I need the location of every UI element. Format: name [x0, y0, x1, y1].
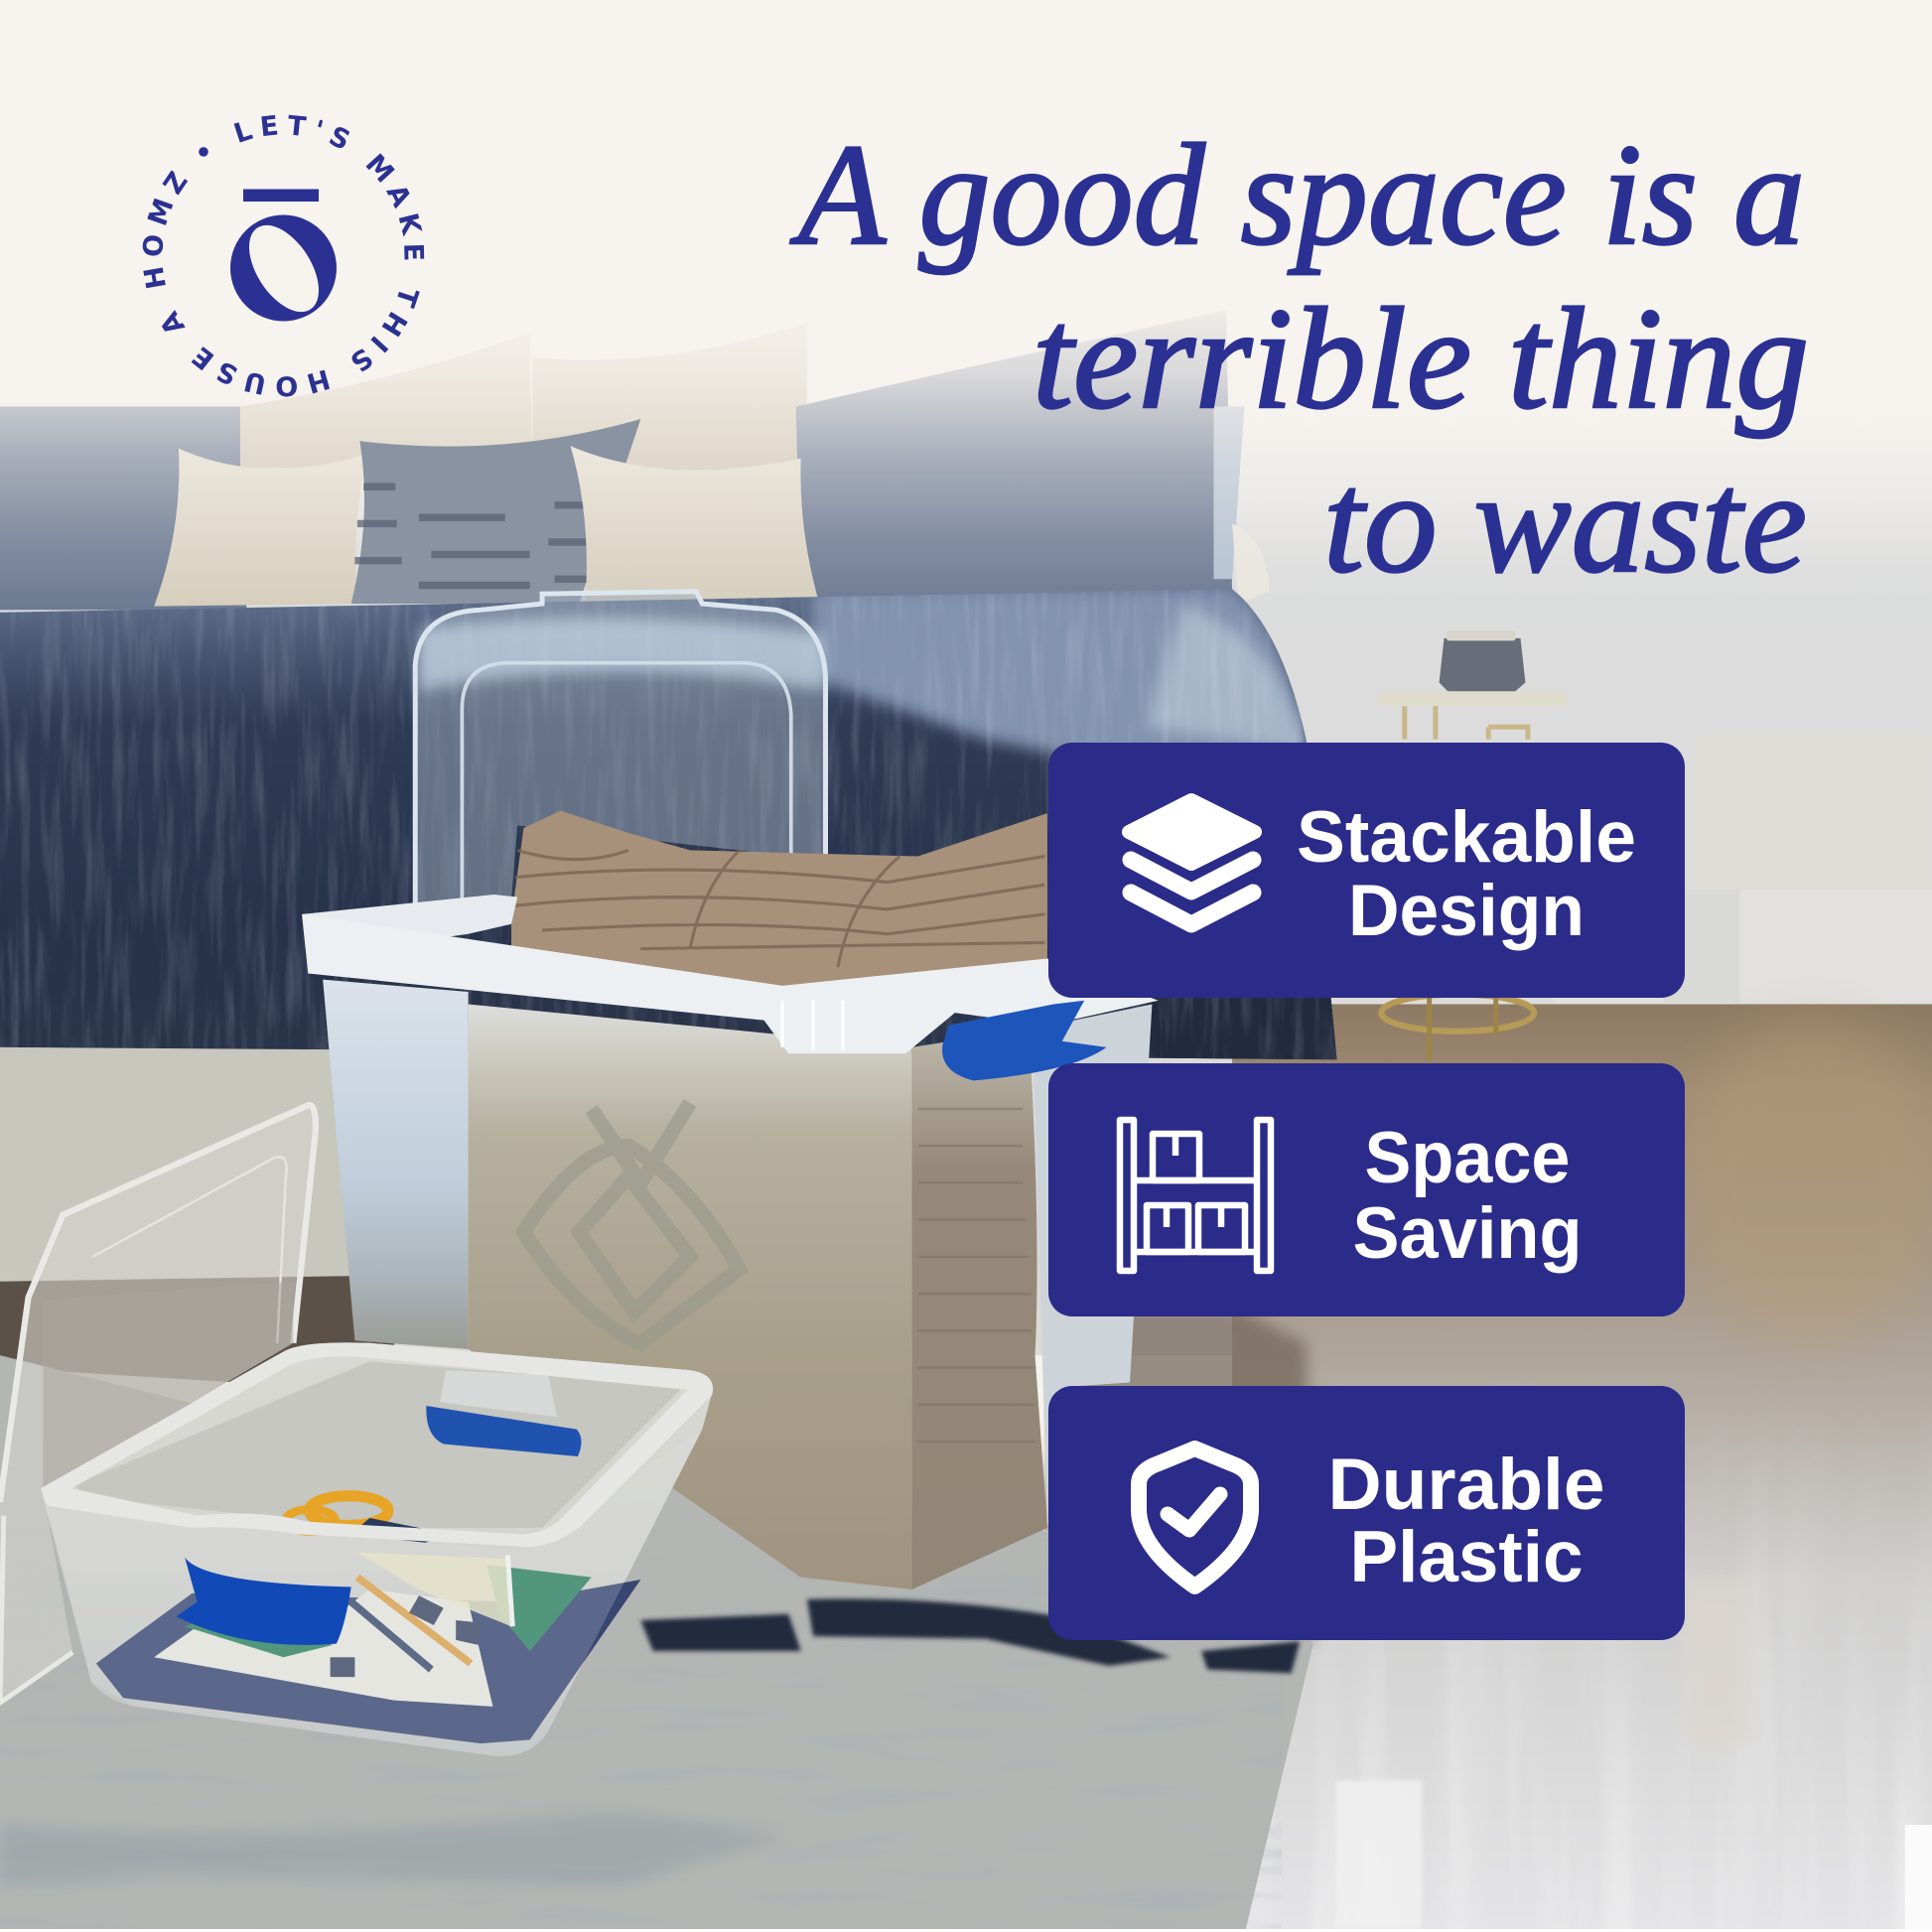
bin back rim: [302, 895, 517, 955]
small lid leaning: [0, 1105, 316, 1703]
panel: space saving: [1048, 1063, 1685, 1316]
bed blanket: [0, 589, 1343, 1069]
label: [1352, 1118, 1583, 1274]
icon: shelving with boxes: [1120, 1120, 1271, 1271]
cream back pillow right: [532, 323, 807, 481]
bin left panel: [323, 980, 469, 1349]
large blue pillow right: [796, 311, 1244, 604]
blue handle: [942, 1001, 1106, 1080]
small storage bin: [41, 1342, 713, 1756]
logo badge: [143, 115, 425, 397]
blurred window greens: [554, 111, 826, 333]
shadow beneath bed: [0, 1276, 394, 1392]
papers bright: [357, 1553, 511, 1626]
bin front with sand pillow: [469, 1004, 911, 1589]
rug: [0, 1355, 1313, 1930]
bottom edge strip: [0, 1929, 1932, 1932]
left dark pillow: [0, 407, 246, 610]
circular tagline: • LET'S MAKE THIS HOUSE A HOMZ: [143, 115, 425, 397]
plastic haze over contents: [50, 1430, 702, 1756]
icon: stacked layers: [1129, 800, 1255, 924]
bin right pillow: [911, 1029, 1047, 1589]
binder clips: [331, 1595, 481, 1677]
label: Stackable: [1297, 797, 1636, 878]
pillow pattern: [523, 1103, 740, 1343]
side table: [1378, 630, 1568, 1059]
label: Plastic: [1350, 1517, 1583, 1597]
title: terrible thing: [1033, 278, 1809, 439]
logo mark: o with macron: [230, 189, 337, 324]
green cover: [185, 1565, 592, 1657]
cream pillow front left: [154, 449, 367, 607]
rim: [41, 1342, 713, 1547]
corner post: [507, 1555, 512, 1626]
warm floor glow: [1676, 1023, 1932, 1343]
wainscot panels and baseboard: [1553, 736, 1932, 1004]
panel: stackable design: [1048, 743, 1685, 998]
floor: [1232, 1004, 1932, 1930]
end bolster: [1232, 523, 1269, 604]
front blue handle: [176, 1558, 351, 1645]
top pillow: [511, 811, 1047, 998]
scissors: [286, 1496, 450, 1543]
title: [790, 114, 1809, 603]
floor reflections: [1335, 1581, 1932, 1930]
label: [1297, 797, 1636, 951]
striped grey pillow: [351, 419, 640, 604]
back handle clear tab: [440, 1370, 557, 1417]
label: Saving: [1352, 1193, 1583, 1274]
right pillow stripes: [918, 1109, 1035, 1442]
large storage bin: [302, 811, 1159, 1589]
label: Design: [1348, 871, 1585, 951]
title: A good space is a: [790, 114, 1805, 275]
binder: [96, 1580, 640, 1743]
cream pillow front right: [571, 446, 819, 604]
pen: [351, 1601, 431, 1670]
cream back pillow left: [240, 333, 532, 469]
icon: shield with check: [1139, 1449, 1251, 1587]
floor vertical streaks: [1900, 1823, 1904, 1910]
label: [1328, 1445, 1604, 1597]
shadow right of bin: [1035, 1307, 1313, 1642]
back blue handle: [426, 1406, 581, 1456]
bed skirt: [0, 1047, 369, 1282]
label: Durable: [1328, 1445, 1604, 1525]
wall: [0, 0, 1932, 1355]
bin base: [41, 1342, 713, 1756]
rim: [302, 914, 1159, 1053]
interior floor texture: [73, 1361, 684, 1528]
title: to waste: [1323, 442, 1807, 603]
panel: durable plastic: [1048, 1386, 1685, 1640]
pencil: [357, 1578, 471, 1663]
bin right translucent side: [1033, 1004, 1152, 1528]
notebook: [154, 1589, 492, 1707]
pale pillow edge: [1213, 407, 1244, 579]
top fade of wall over pillows: [0, 0, 1932, 604]
lid leaning behind large bin: [415, 592, 826, 905]
label: Space: [1364, 1118, 1571, 1198]
